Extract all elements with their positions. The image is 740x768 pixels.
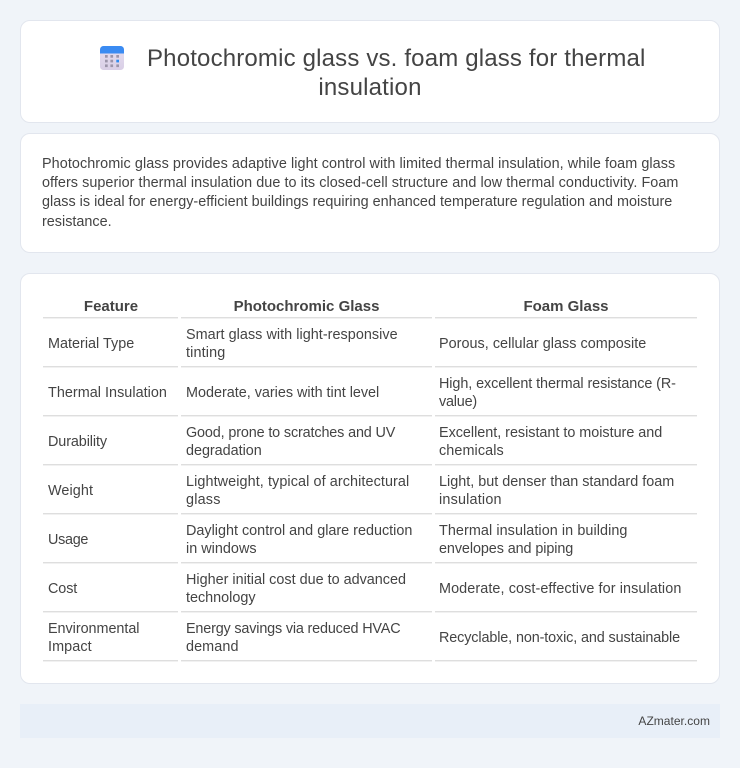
intro text: Photochromic glass provides adaptive light control with limited thermal insulation, while foam glass bbox=[42, 156, 675, 172]
intro card bbox=[20, 133, 720, 253]
row: Environmental Impact bbox=[48, 621, 139, 655]
row: Environmental Impact: Environmental bbox=[48, 621, 139, 637]
comparison table: Higher initial cost due to advanced bbox=[186, 572, 406, 588]
comparison table: Thermal insulation in building bbox=[439, 523, 627, 539]
comparison table: Daylight control and glare reduction bbox=[186, 523, 412, 539]
title bbox=[147, 45, 646, 101]
comparison table: Excellent, resistant to moisture and bbox=[439, 425, 662, 441]
title: insulation bbox=[318, 74, 422, 101]
title: Photochromic glass vs. foam glass for thermal bbox=[147, 45, 646, 72]
intro text: resistance. bbox=[42, 214, 112, 230]
comparison table: envelopes and piping bbox=[439, 541, 573, 557]
comparison table: in windows bbox=[186, 541, 257, 557]
intro text: offers superior thermal insulation due to its closed-cell structure and low thermal conductivity. Foam bbox=[42, 175, 678, 191]
row: Cost: Cost bbox=[48, 581, 77, 597]
row: Weight: Weight bbox=[48, 483, 93, 499]
comparison table: technology bbox=[186, 590, 256, 606]
footer credit: AZmater.com bbox=[638, 714, 710, 728]
comparison table: demand bbox=[186, 639, 239, 655]
row: Usage: Usage bbox=[48, 532, 88, 548]
row: Durability: Durability bbox=[48, 434, 107, 450]
comparison table: Smart glass with light-responsive bbox=[186, 327, 398, 343]
comparison table: Moderate, varies with tint level bbox=[186, 385, 379, 401]
comparison table: Light, but denser than standard foam bbox=[439, 474, 674, 490]
comparison table: chemicals bbox=[439, 443, 504, 459]
comparison table: value) bbox=[439, 394, 477, 410]
row: Environmental Impact: Impact bbox=[48, 639, 92, 655]
comparison table: tinting bbox=[186, 345, 225, 361]
row: Thermal Insulation: Thermal Insulation bbox=[48, 385, 167, 401]
footer bar bbox=[20, 704, 720, 738]
comparison table: Energy savings via reduced HVAC bbox=[186, 621, 400, 637]
header: Feature: Feature bbox=[84, 298, 138, 315]
intro text bbox=[42, 156, 678, 230]
comparison table: Good, prone to scratches and UV bbox=[186, 425, 395, 441]
intro text: glass is ideal for energy-efficient buildings requiring enhanced temperature regulation and moisture bbox=[42, 194, 672, 210]
comparison table: insulation bbox=[439, 492, 502, 508]
comparison table: High, excellent thermal resistance (R- bbox=[439, 376, 676, 392]
comparison table: degradation bbox=[186, 443, 262, 459]
row: Material Type: Material Type bbox=[48, 336, 134, 352]
icon: calendar bbox=[100, 46, 124, 70]
comparison table: Moderate, cost-effective for insulation bbox=[439, 581, 681, 597]
header card bbox=[20, 20, 720, 123]
comparison table: glass bbox=[186, 492, 221, 508]
comparison table: Recyclable, non-toxic, and sustainable bbox=[439, 630, 680, 646]
comparison table: Porous, cellular glass composite bbox=[439, 336, 646, 352]
header: Foam Glass: Foam Glass bbox=[523, 298, 609, 315]
header: Photochromic Glass: Photochromic Glass bbox=[234, 298, 379, 315]
comparison table: Lightweight, typical of architectural bbox=[186, 474, 409, 490]
table card bbox=[20, 273, 720, 684]
